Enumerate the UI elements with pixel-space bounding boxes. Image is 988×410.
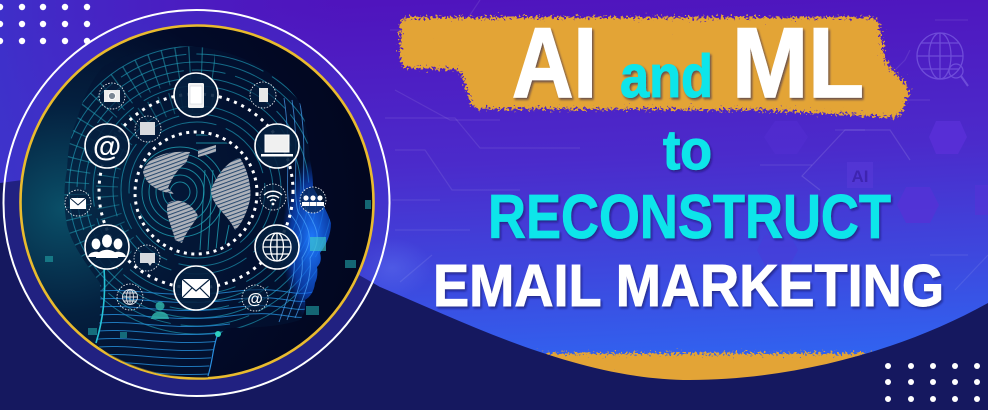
icon: faint AI chip: AI (852, 167, 868, 186)
icon: small wifi (260, 184, 286, 210)
title line: AI and ML: and (620, 43, 713, 110)
title (433, 7, 944, 319)
outer ring (4, 10, 390, 396)
neck front line (208, 334, 218, 376)
icon: small people (300, 187, 326, 213)
neck back highlight line (96, 268, 105, 343)
radial spokes on the upper left of the skull (64, 46, 215, 290)
icon: globe badge (255, 225, 299, 269)
icon: small phone (250, 82, 276, 108)
icon: small tablet (135, 116, 161, 142)
icon: laptop badge (255, 124, 299, 168)
icon: phone badge (174, 73, 218, 117)
title line: RECONSTRUCT: RECONSTRUCT (488, 183, 891, 252)
icon: small envelope (65, 190, 91, 216)
blue face glow (284, 162, 331, 314)
icon: at sign badge: @ (93, 131, 121, 163)
faint hexagons (764, 121, 808, 154)
circular AI head illustration (19, 24, 375, 380)
dark disc with yellow ring (20, 26, 374, 378)
title line: EMAIL MARKETING: EMAIL MARKETING (433, 253, 944, 319)
large dotted ring (99, 94, 293, 288)
decorative dots top left (0, 4, 90, 44)
icon: small camera (99, 83, 125, 109)
inner ring fingerprint contours (140, 134, 230, 250)
icon: small at sign (242, 285, 268, 311)
lower neck waves (90, 290, 320, 375)
icon: at sign badge (85, 124, 129, 168)
inner dotted ring (135, 132, 257, 254)
icon: small globe (117, 284, 143, 310)
icon: faint AI chip (847, 162, 873, 188)
background circuit lines and hexagons (385, 0, 988, 290)
title line: AI and ML: ML (732, 7, 864, 118)
icon: people badge (85, 225, 129, 269)
gold brush strip under wave (490, 353, 910, 403)
world map (143, 145, 251, 243)
teal throat highlight (215, 331, 221, 337)
icon: small chat bubble (134, 245, 160, 271)
head line art (45, 46, 371, 378)
small floating teal squares (45, 200, 371, 338)
icon: faint globe with magnifier (917, 33, 968, 86)
icon: small at sign: @ (247, 291, 263, 308)
navy bottom wave (0, 179, 988, 410)
teal person icon (151, 302, 169, 319)
gold brush stroke behind headline (400, 17, 911, 118)
title line: to: to (663, 118, 712, 181)
title line: AI and ML (512, 7, 864, 118)
title line: AI and ML: AI (512, 7, 597, 118)
decorative dots bottom right (885, 363, 980, 402)
icon: envelope badge (174, 266, 218, 310)
